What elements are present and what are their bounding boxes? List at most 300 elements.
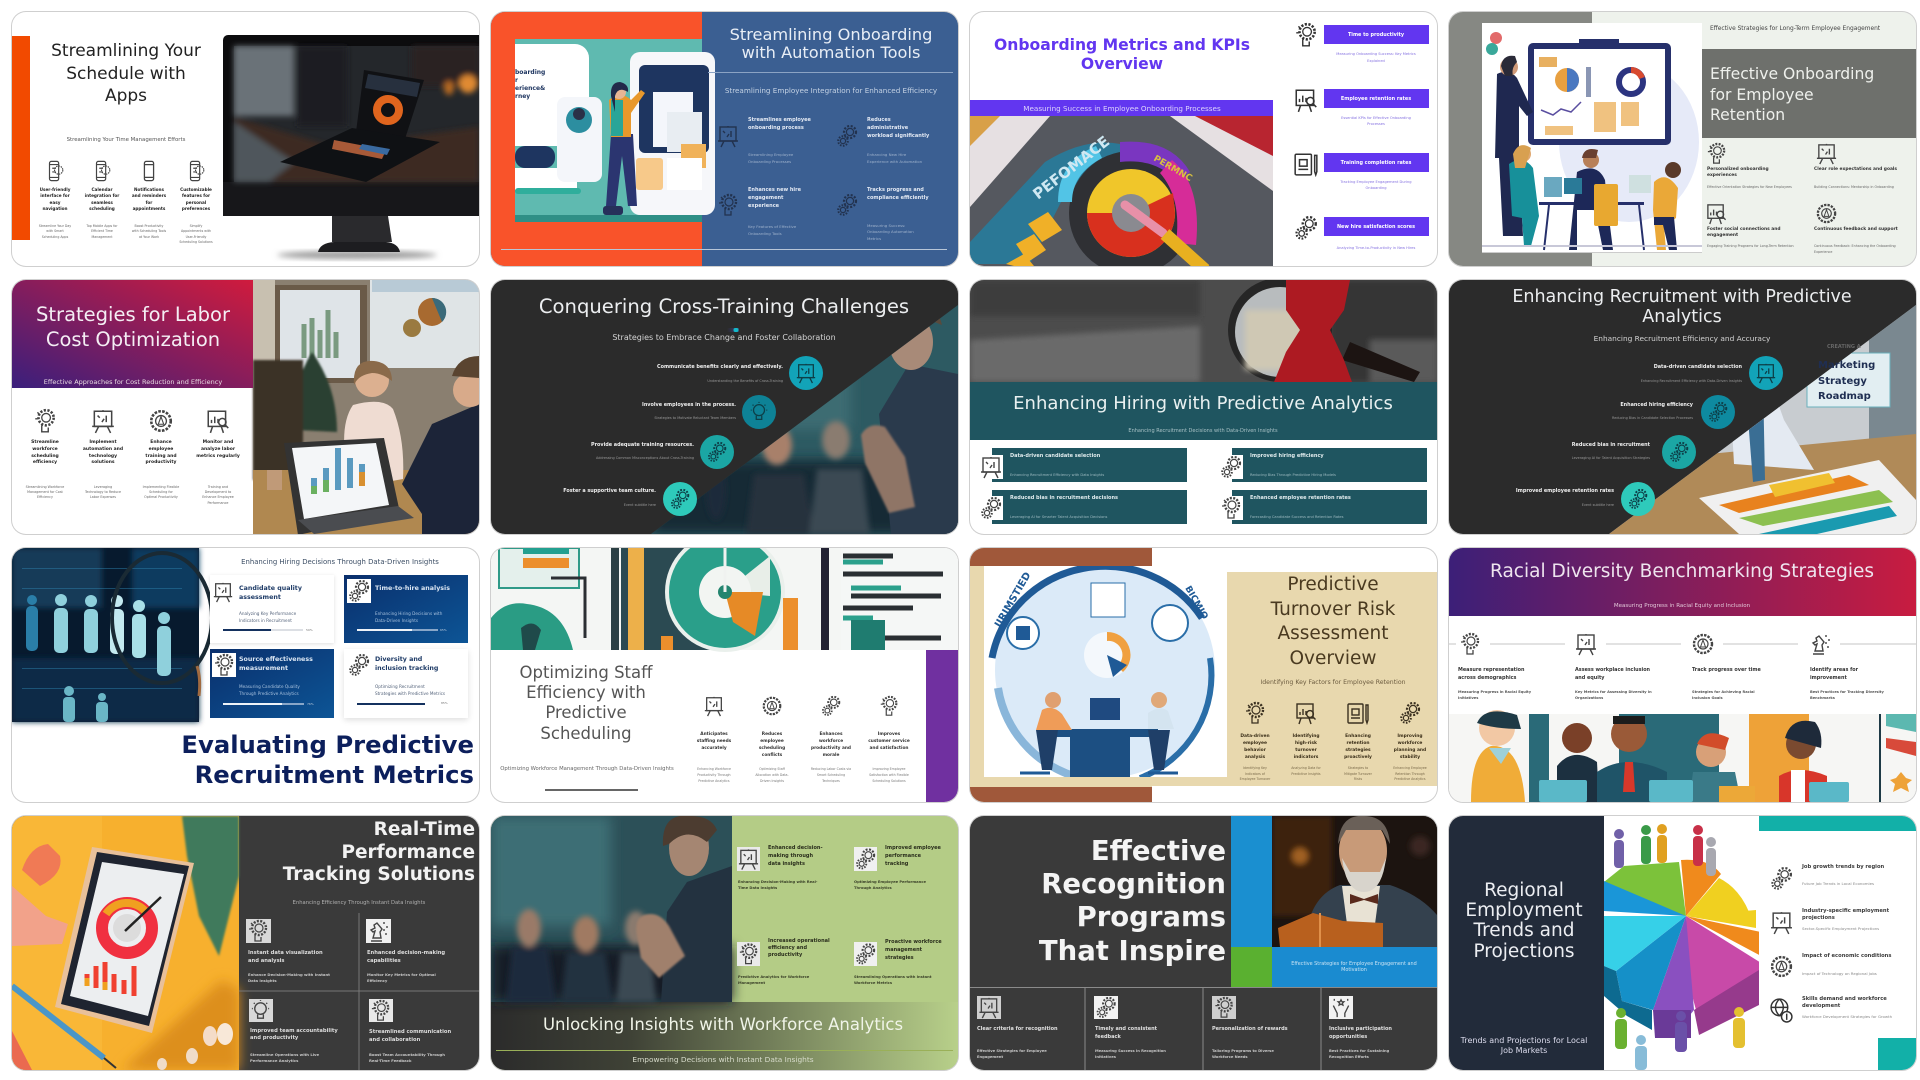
feature note 1: with Smart <box>46 229 64 233</box>
trend heading 4: development <box>1802 1003 1840 1009</box>
strategy note 3: Implementing Flexible <box>143 485 179 489</box>
roadmap label: Marketing <box>1818 360 1875 371</box>
strategy note 2: Building Connections: Mentorship in Onboarding <box>1814 185 1894 189</box>
icon: board <box>703 695 725 717</box>
callout: Motivation <box>1341 967 1367 973</box>
step note 3: Strategies for Achieving Racial <box>1692 690 1755 694</box>
step note 4 <box>1810 689 1884 701</box>
factor note 2 <box>1291 766 1321 777</box>
item note 1: Enhancing Recruitment Efficiency with Data Insights <box>1010 473 1104 477</box>
benefit note 3: Key Features of Effective <box>748 224 796 229</box>
icon: gears in teal circle <box>662 481 698 517</box>
KPI label 2: Employee retention rates <box>1341 96 1411 102</box>
benefit note 4: Metrics <box>867 236 881 241</box>
icon: gears on white tile <box>347 579 371 603</box>
icon: board <box>1769 910 1794 935</box>
benefit label 2: scheduling <box>759 746 785 751</box>
panel: Strategies for Labor Cost Optimization <box>12 280 479 534</box>
subtitle: Enhancing Efficiency Through Instant Data Insights <box>293 900 425 906</box>
insight note 4 <box>854 974 931 987</box>
subtitle: Effective Approaches for Cost Reduction and Efficiency <box>44 378 222 386</box>
benefit note 2: Experience with Automation <box>867 159 922 164</box>
strategy heading 3 <box>1707 227 1781 239</box>
strategy note 4: Continuous Feedback: Enhancing the Onboarding <box>1814 244 1896 248</box>
icon: ring <box>1815 202 1838 225</box>
title: with Automation Tools <box>742 42 920 62</box>
subtitle: Job Markets <box>1501 1046 1547 1055</box>
step heading 4: Identify areas for <box>1810 667 1858 673</box>
subtitle: Measuring Success in Employee Onboarding Processes <box>1023 104 1221 113</box>
item 4 heading: Improved employee retention rates <box>1516 488 1614 494</box>
panel: Streamlining Onboarding with Automation Tools <box>491 12 958 266</box>
benefit label 3: workforce <box>819 739 843 744</box>
value 1: 59% <box>306 628 313 632</box>
heading 1 <box>239 584 302 603</box>
KPI note 4: Analyzing Time-to-Productivity in New Hires <box>1337 246 1415 250</box>
tile heading 1 <box>248 949 323 965</box>
item 4 heading: Foster a supportive team culture. <box>563 488 656 494</box>
strategy note 3: Engaging Training Programs for Long-Term Retention <box>1707 244 1794 248</box>
trend note 2: Sector-Specific Employment Projections <box>1802 926 1879 931</box>
caption: CREATING A <box>1827 344 1861 350</box>
title: Performance <box>341 842 475 862</box>
benefit label 2: conflicts <box>762 753 782 758</box>
value 2: 65% <box>440 628 447 632</box>
image: team meeting illustration <box>1449 12 1702 266</box>
tile note 2: Efficiency <box>367 978 387 983</box>
title: Strategies for Labor <box>36 303 230 326</box>
strategy label 1: scheduling <box>31 454 59 459</box>
title <box>1512 287 1852 327</box>
benefit note 1 <box>748 152 793 164</box>
benefit heading 4: compliance efficiently <box>867 195 929 201</box>
strategy label 1: efficiency <box>33 460 57 465</box>
criterion note 4: Best Practices for Sustaining <box>1329 1049 1389 1053</box>
icon: gears <box>347 653 371 677</box>
item 1 note: Understanding the Benefits of Cross-Training <box>707 379 783 383</box>
strategy label 2 <box>83 440 123 467</box>
title: Turnover Risk <box>1271 599 1395 620</box>
benefit note 1: Onboarding Processes <box>748 159 791 164</box>
icon: clock tile <box>1094 996 1118 1019</box>
benefit heading 2: workload significantly <box>867 133 929 139</box>
trend heading 2: Industry-specific employment <box>1802 908 1889 914</box>
insight note 2 <box>854 879 926 892</box>
progress 1 <box>223 629 303 631</box>
feature label 1: navigation <box>42 206 68 211</box>
subtitle: Empowering Decisions with Instant Data Insights <box>632 1055 814 1064</box>
strategy label 1: Streamline <box>31 440 59 445</box>
strategy label 4: analyze labor <box>201 447 235 452</box>
subtitle band <box>970 100 1273 116</box>
icon: board <box>90 408 116 434</box>
benefit note 4: Scheduling Solutions <box>872 779 906 783</box>
insight heading 4: strategies <box>885 955 914 961</box>
criterion note 2: Measuring Success in Recognition <box>1095 1049 1166 1053</box>
item heading 2: Improved hiring efficiency <box>1250 453 1324 459</box>
benefit label 3: productivity and <box>811 746 851 751</box>
roadmap label: Strategy <box>1818 376 1867 386</box>
title: Effective <box>1091 835 1226 867</box>
KPI note 1: Measuring Onboarding Success: Key Metrics <box>1336 52 1416 56</box>
insight note 1: Time Data Insights <box>738 886 777 890</box>
benefit heading 3: experience <box>748 203 779 209</box>
feature label 1: User-friendly <box>40 187 70 192</box>
factor note 4 <box>1393 766 1427 783</box>
tile note 2 <box>367 972 436 984</box>
title: Effective Onboarding <box>1710 65 1874 83</box>
benefit heading 1 <box>748 117 811 131</box>
feature note 4: Appointments with <box>181 229 211 233</box>
step note 1 <box>1458 689 1531 701</box>
feature label 1: easy <box>50 200 60 205</box>
value 4: 85% <box>441 701 448 705</box>
subtitle <box>1461 1036 1587 1056</box>
benefit note 4 <box>867 223 914 241</box>
title: Streamlining Onboarding <box>730 25 932 44</box>
criterion note 4 <box>1329 1048 1389 1060</box>
title: Tracking Solutions <box>283 864 475 885</box>
factor note 1: Identifying Key <box>1243 766 1267 770</box>
icon: head gear <box>1458 632 1482 656</box>
title: Real-Time <box>374 819 475 840</box>
strategy heading 2: Clear role expectations and goals <box>1814 167 1897 172</box>
strategy heading 1: experiences <box>1707 173 1737 178</box>
benefit heading 2 <box>867 117 930 139</box>
strategy heading 1: Personalized onboarding <box>1707 167 1769 172</box>
feature note 4: Scheduling Solutions <box>179 240 213 244</box>
criterion heading 4: opportunities <box>1329 1034 1367 1040</box>
icon: globe and coin <box>1769 998 1794 1023</box>
image: turnover risk illustration: BICMJO <box>1182 584 1210 622</box>
box 2 <box>1232 448 1427 482</box>
insight heading 1 <box>768 845 823 868</box>
benefit heading 1: Streamlines employee <box>748 117 811 123</box>
tile heading 4: Streamlined communication <box>369 1029 451 1035</box>
feature note 4: Simplify <box>190 224 202 228</box>
icon: clock gears <box>979 496 1003 520</box>
image: performance gauge <box>970 116 1273 266</box>
title: Conquering Cross-Training Challenges <box>539 295 909 318</box>
feature label 4 <box>180 187 212 211</box>
step note 1: Measuring Progress in Racial Equity <box>1458 690 1531 694</box>
tile heading 2 <box>367 949 445 965</box>
tile note 1: Data Insights <box>248 978 277 983</box>
feature label 3: for <box>146 200 152 205</box>
subtitle: Trends and Projections for Local <box>1461 1036 1587 1045</box>
image: performance gauge: PEFOMACE <box>1029 132 1113 203</box>
title: Projections <box>1473 941 1575 962</box>
heading 2: Time-to-hire analysis <box>375 585 450 592</box>
item 2 note: Strategies to Motivate Reluctant Team Members <box>654 416 736 420</box>
criterion note 1: Effective Strategies for Employee <box>977 1049 1047 1053</box>
item 3 heading: Reduced bias in recruitment <box>1572 442 1650 448</box>
icon: chart <box>1296 90 1317 112</box>
card: time-to-hire <box>344 575 468 643</box>
title: That Inspire <box>1039 935 1226 967</box>
factor label 4: workforce <box>1398 741 1422 746</box>
icon: clock ring <box>1769 954 1794 979</box>
benefit label 1: accurately <box>701 746 727 751</box>
progress 3 <box>223 703 304 705</box>
strategy label 3 <box>145 440 177 467</box>
criterion note 3 <box>1212 1048 1274 1060</box>
icon: gears <box>1219 455 1243 479</box>
step heading 1: Measure representation <box>1458 667 1524 673</box>
trend note 1: Future Job Trends in Local Economies <box>1802 881 1874 886</box>
KPI note 1 <box>1336 52 1416 63</box>
criterion heading 1: Clear criteria for recognition <box>977 1026 1058 1032</box>
icon: gears <box>837 125 858 147</box>
image: desktop monitor showing tablet <box>223 35 479 262</box>
benefit note 1: Enhancing Workforce <box>697 767 731 771</box>
KPI label 1: Time to productivity <box>1348 32 1404 38</box>
card: diversity tracking <box>344 649 468 718</box>
strategy note 1: Management for Cost <box>27 490 63 494</box>
icon: head gear <box>1243 701 1267 725</box>
factor note 3 <box>1344 766 1372 783</box>
icon: notebook <box>1294 154 1318 177</box>
strategy note 4: Enhance Employee <box>202 495 234 499</box>
insight heading 1: Enhanced decision- <box>768 845 823 851</box>
criterion heading 3: Personalization of rewards <box>1212 1026 1288 1032</box>
factor note 4: Retention Through <box>1395 772 1425 776</box>
benefit note 4 <box>869 766 909 784</box>
title: Overview <box>1289 648 1377 669</box>
note 3: Through Predictive Analytics <box>239 691 299 696</box>
title: Enhancing Hiring with Predictive Analytics <box>1013 393 1393 414</box>
subtitle: Enhancing Recruitment Efficiency and Accuracy <box>1594 334 1770 343</box>
strategy label 3: productivity <box>146 460 176 465</box>
insight note 3: Management <box>738 981 765 985</box>
underline <box>545 789 638 791</box>
box 4 <box>1232 490 1427 524</box>
feature note 1 <box>39 224 71 239</box>
item note 3: Leveraging AI for Smarter Talent Acquisition Decisions <box>1010 515 1107 519</box>
tile note 1: Enhance Decision-Making with Instant <box>248 972 330 977</box>
step note 1: Initiatives <box>1458 696 1478 700</box>
step note 3 <box>1692 689 1755 701</box>
benefit heading 3: engagement <box>748 195 783 201</box>
factor note 2: Predictive Insights <box>1291 772 1321 776</box>
strategy note 2: Labor Expenses <box>90 495 116 499</box>
icon: ring <box>761 695 783 717</box>
strategy heading 1 <box>1707 166 1769 178</box>
title: Evaluating Predictive <box>181 730 474 759</box>
step heading 4 <box>1810 666 1858 682</box>
benefit heading 2: administrative <box>867 125 908 131</box>
benefit note 1: Predictive Analytics <box>698 779 730 783</box>
factor label 3: Enhancing <box>1345 734 1371 739</box>
callout: Effective Strategies for Employee Engagement and <box>1291 961 1417 967</box>
KPI note 3 <box>1340 180 1412 190</box>
KPI button 2 <box>1324 89 1429 108</box>
icon: chess <box>1808 632 1832 656</box>
title panel <box>1702 49 1916 138</box>
heading 4: inclusion tracking <box>375 665 438 672</box>
benefit label 3 <box>811 732 851 760</box>
feature label 3 <box>132 187 166 211</box>
heading 4 <box>375 655 438 674</box>
benefit heading 1: onboarding process <box>748 125 804 131</box>
benefit note 4: Measuring Success: <box>867 223 905 228</box>
feature label 3: appointments <box>133 206 165 211</box>
strategy label 3: training and <box>145 454 177 459</box>
factor label 2 <box>1292 733 1320 761</box>
subtitle: Streamlining Your Time Management Efforts <box>67 137 185 143</box>
icon: chart <box>205 408 231 434</box>
insight note 4: Streamlining Operations with Instant <box>854 975 931 979</box>
note 2: Data-Driven Insights <box>375 618 418 623</box>
value 3: 76% <box>307 702 314 706</box>
image: performance gauge: PERMNC <box>1152 154 1194 184</box>
step note 2: Key Metrics for Assessing Diversity in <box>1575 690 1652 694</box>
icon: clock tile <box>854 942 877 966</box>
criterion heading 4 <box>1329 1025 1392 1041</box>
KPI label 3: Training completion rates <box>1341 160 1411 166</box>
insight note 4: Workforce Metrics <box>854 981 892 985</box>
criterion note 1 <box>977 1048 1047 1060</box>
strategy label 2: automation and <box>83 447 123 452</box>
icon: board tile <box>977 996 1001 1019</box>
feature note 2: Management <box>92 235 112 239</box>
tile heading 4: and collaboration <box>369 1037 420 1043</box>
title: Cost Optimization <box>46 328 220 351</box>
title band <box>970 382 1437 440</box>
subtitle: Optimizing Workforce Management Through Data-Driven Insights <box>500 766 674 772</box>
tile heading 3: and productivity <box>250 1035 298 1041</box>
step heading 2: Assess workplace inclusion <box>1575 667 1650 673</box>
item heading 3: Reduced bias in recruitment decisions <box>1010 495 1118 501</box>
step heading 2: and equity <box>1575 675 1604 681</box>
insight heading 2: Improved employee <box>885 845 941 851</box>
connector lines <box>1449 548 1916 802</box>
icon: head gear <box>719 194 738 216</box>
icon: head gear on white tile <box>212 653 236 677</box>
benefit label 4 <box>868 732 910 753</box>
accent dots <box>721 328 739 332</box>
insight heading 2 <box>885 845 941 868</box>
icon: notebook <box>1346 701 1370 725</box>
item note 2: Reducing Bias Through Predictive Hiring Models <box>1250 473 1336 477</box>
icon: bulb in teal circle <box>741 394 777 430</box>
heading 1: assessment <box>239 594 281 601</box>
benefit note 2: Enhancing New Hire <box>867 152 906 157</box>
trend heading 2: projections <box>1802 915 1835 921</box>
factor label 3: retention <box>1346 741 1370 746</box>
trend note 4: Workforce Development Strategies for Growth <box>1802 1014 1892 1019</box>
item 2 heading: Enhanced hiring efficiency <box>1620 402 1693 408</box>
note 1: Indicators in Recruitment <box>239 618 292 623</box>
benefit note 3 <box>811 766 851 784</box>
factor note 3: Mitigate Turnover <box>1344 772 1372 776</box>
box 1 <box>992 448 1187 482</box>
benefit note 1 <box>697 766 731 784</box>
icon: phone <box>48 160 64 182</box>
title: Scheduling <box>540 724 632 743</box>
trend heading 4: Skills demand and workforce <box>1802 996 1887 1002</box>
feature label 2 <box>84 187 120 211</box>
factor label 4: stability <box>1400 755 1420 760</box>
icon: bulb tile <box>249 999 273 1022</box>
image: 3D pie chart with figures <box>1449 816 1916 1070</box>
note 4: Strategies with Predictive Metrics <box>375 691 445 696</box>
callout <box>1291 961 1417 974</box>
icon: gears <box>1769 866 1794 891</box>
roadmap label <box>1818 358 1875 404</box>
benefit heading 2: Reduces <box>867 117 891 123</box>
card: candidate quality <box>210 575 334 643</box>
strategy label 2: technology <box>89 454 117 459</box>
benefit label 1: staffing needs <box>697 739 731 744</box>
header line text: Effective Strategies for Long-Term Employee Engagement <box>1710 26 1880 32</box>
note 3 <box>239 683 300 698</box>
tile heading 2: Enhanced decision-making <box>367 950 445 956</box>
strategy heading 4: Continuous feedback and support <box>1814 227 1898 232</box>
grid lines <box>970 816 1437 1070</box>
insight heading 1: data insights <box>768 861 805 867</box>
title: Overview <box>1081 55 1163 73</box>
benefit note 3: Reducing Labor Costs via <box>811 767 851 771</box>
image: tablet with target gauge <box>12 816 479 1070</box>
item 1 note: Enhancing Recruitment Efficiency with Data-Driven Insights <box>1641 379 1742 383</box>
feature label 1: interface for <box>40 193 70 198</box>
factor note 1: Employee Turnover <box>1240 777 1270 781</box>
heading 3: Source effectiveness <box>239 656 313 663</box>
strategy label 1 <box>31 440 59 467</box>
strategy note 3: Scheduling for <box>149 490 173 494</box>
feature label 4: personal <box>186 200 206 205</box>
note 4: Optimizing Recruitment <box>375 684 425 689</box>
title: Unlocking Insights with Workforce Analytics <box>543 1015 903 1034</box>
image: onboarding app illustration <box>491 12 715 266</box>
criterion heading 4: Inclusive participation <box>1329 1026 1392 1032</box>
feature note 2: Top Mobile Apps for <box>86 224 118 228</box>
subtitle: Enhancing Hiring Decisions Through Data-Driven Insights <box>241 558 439 566</box>
icon: head gear in teal circle <box>699 434 735 470</box>
image: onboarding app illustration: erience& <box>515 85 545 92</box>
image: onboarding app illustration: rney <box>515 93 530 100</box>
strategy note 4 <box>1814 244 1896 255</box>
factor label 2: high-risk <box>1295 741 1317 746</box>
progress 2 <box>357 629 438 631</box>
strategy note 4 <box>202 485 234 506</box>
factor label 1: behavior <box>1244 748 1266 753</box>
title <box>181 730 474 790</box>
strategy heading 3: Foster social connections and <box>1707 227 1781 232</box>
panel: Real-Time Performance Tracking Solutions <box>12 816 479 1070</box>
icon: idea tile <box>246 919 271 943</box>
icon: board <box>979 455 1003 479</box>
criterion note 4: Recognition Efforts <box>1329 1055 1369 1059</box>
panel: Streamlining Your Schedule with Apps <box>12 12 479 266</box>
benefit note 4: Improving Employee <box>873 767 905 771</box>
tile heading 1: and analysis <box>248 958 285 964</box>
feature label 4: Customizable <box>180 187 212 192</box>
trend note 3: Impact of Technology on Regional Jobs <box>1802 971 1877 976</box>
benefit label 2: employee <box>760 739 784 744</box>
feature note 4: User-Friendly <box>186 235 206 239</box>
insight note 2: Through Analytics <box>854 886 892 890</box>
KPI button 3 <box>1324 153 1429 172</box>
strategy note 4: Training and <box>208 485 228 489</box>
factor label 2: indicators <box>1294 755 1318 760</box>
image: diverse team illustration <box>1449 548 1916 802</box>
item 3 heading: Provide adequate training resources. <box>591 442 694 448</box>
benefit note 2: Allocation with Data- <box>755 773 789 777</box>
item 1 heading: Data-driven candidate selection <box>1654 364 1742 370</box>
strategy label 2: Implement <box>89 440 117 445</box>
